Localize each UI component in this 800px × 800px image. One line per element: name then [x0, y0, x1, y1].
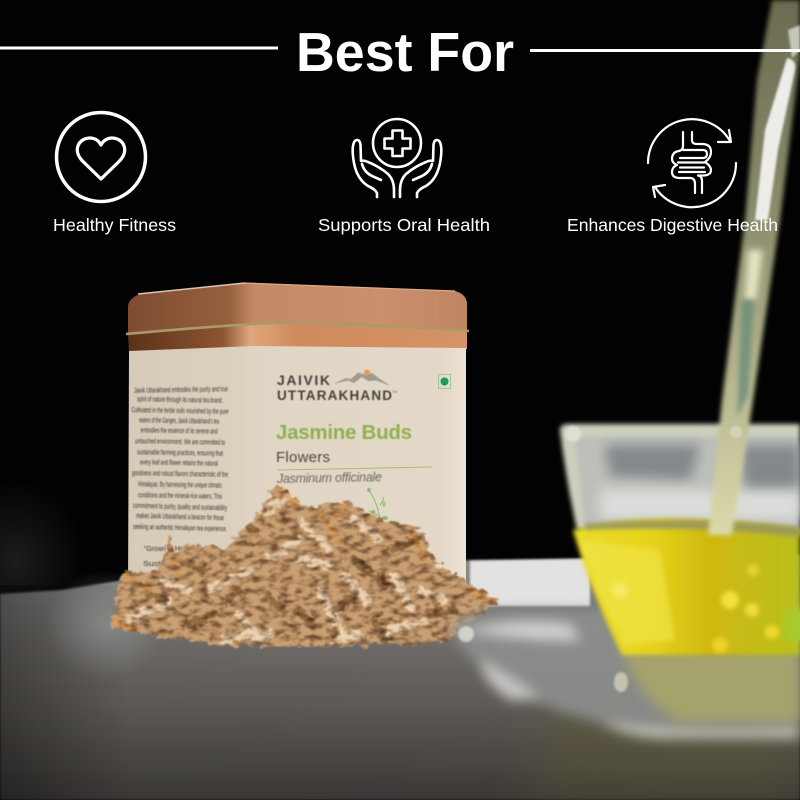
back panel description text: untouched environment. We are committed to	[135, 436, 225, 447]
tin body label	[128, 346, 466, 592]
icon: hands holding medical cross	[353, 119, 441, 197]
benefit: Enhances Digestive Health	[567, 119, 778, 235]
benefit: Healthy Fitness	[53, 112, 176, 235]
back panel description text: spirit of nature through its natural tea brand.	[137, 394, 223, 405]
label: Healthy Fitness	[53, 215, 176, 235]
benefit: Supports Oral Health	[318, 119, 490, 235]
label divider	[277, 467, 432, 470]
title: Best For: Best For	[296, 21, 514, 83]
liquid bokeh	[580, 540, 800, 653]
tin lid	[126, 283, 469, 353]
back panel description text: commitment to purity, quality and sustainability	[133, 501, 227, 512]
back panel description text: every leaf and flower retains the natural	[140, 457, 218, 468]
back panel description text: goodness and robust flavors characteristic of the	[132, 468, 228, 479]
glass highlights	[458, 426, 743, 692]
label: Enhances Digestive Health	[567, 215, 778, 235]
botanical name: Jasminum officinale	[276, 470, 382, 486]
product name: Jasmine Buds	[276, 421, 412, 444]
back panel description text: Cultivated in the fertile soils nourished by the pure	[131, 405, 229, 416]
product type: Flowers	[276, 449, 330, 466]
back panel description text: Jaivik Uttarakhand embodies the purity and true	[134, 384, 228, 395]
label: Supports Oral Health	[318, 215, 490, 235]
back panel description text: Himalayas. By harnessing the unique climatic	[138, 479, 222, 490]
back panel description text: makes Jaivik Uttarakhand a beacon for those	[136, 511, 224, 522]
tea glass	[458, 424, 800, 722]
back panel description text: sustainable farming practices, ensuring that	[137, 447, 223, 458]
yellow tea liquid	[573, 519, 800, 655]
light petals	[130, 497, 445, 640]
table surface	[0, 555, 800, 800]
back panel description text	[131, 384, 229, 568]
icon: heart in circle	[56, 112, 146, 202]
back panel description text: seeking an authentic Himalayan tea experience.	[133, 522, 227, 533]
back panel description text: waters of the Ganges, Jaivik Uttarakhand's tea	[138, 415, 220, 426]
back panel description text: "Grown in Himalayas	[144, 544, 206, 553]
dark gaps	[150, 520, 455, 640]
brand logo: JAIVIK	[277, 372, 330, 388]
glass base	[622, 650, 800, 722]
product tin	[126, 283, 469, 592]
tea surface	[585, 520, 800, 537]
back panel description text: embodies the essence of its serene and	[140, 425, 218, 436]
pouring tea stream	[708, 0, 800, 535]
glass saucer	[452, 600, 800, 738]
brand logo: UTTARAKHAND	[277, 388, 392, 403]
brand logo: TM	[392, 390, 397, 394]
icon: intestine with cycle arrows	[648, 119, 736, 207]
botanical sprig	[367, 488, 388, 520]
back panel description text: conditions and the mineral-rice waters, This	[138, 490, 222, 501]
glass upper wall	[560, 424, 800, 535]
brand logo	[277, 370, 397, 403]
glass reflections	[600, 445, 800, 520]
veg mark	[438, 374, 450, 388]
orange strands	[115, 487, 497, 640]
jasmine buds pile	[110, 483, 500, 647]
back panel description text: Sustain	[143, 559, 173, 568]
